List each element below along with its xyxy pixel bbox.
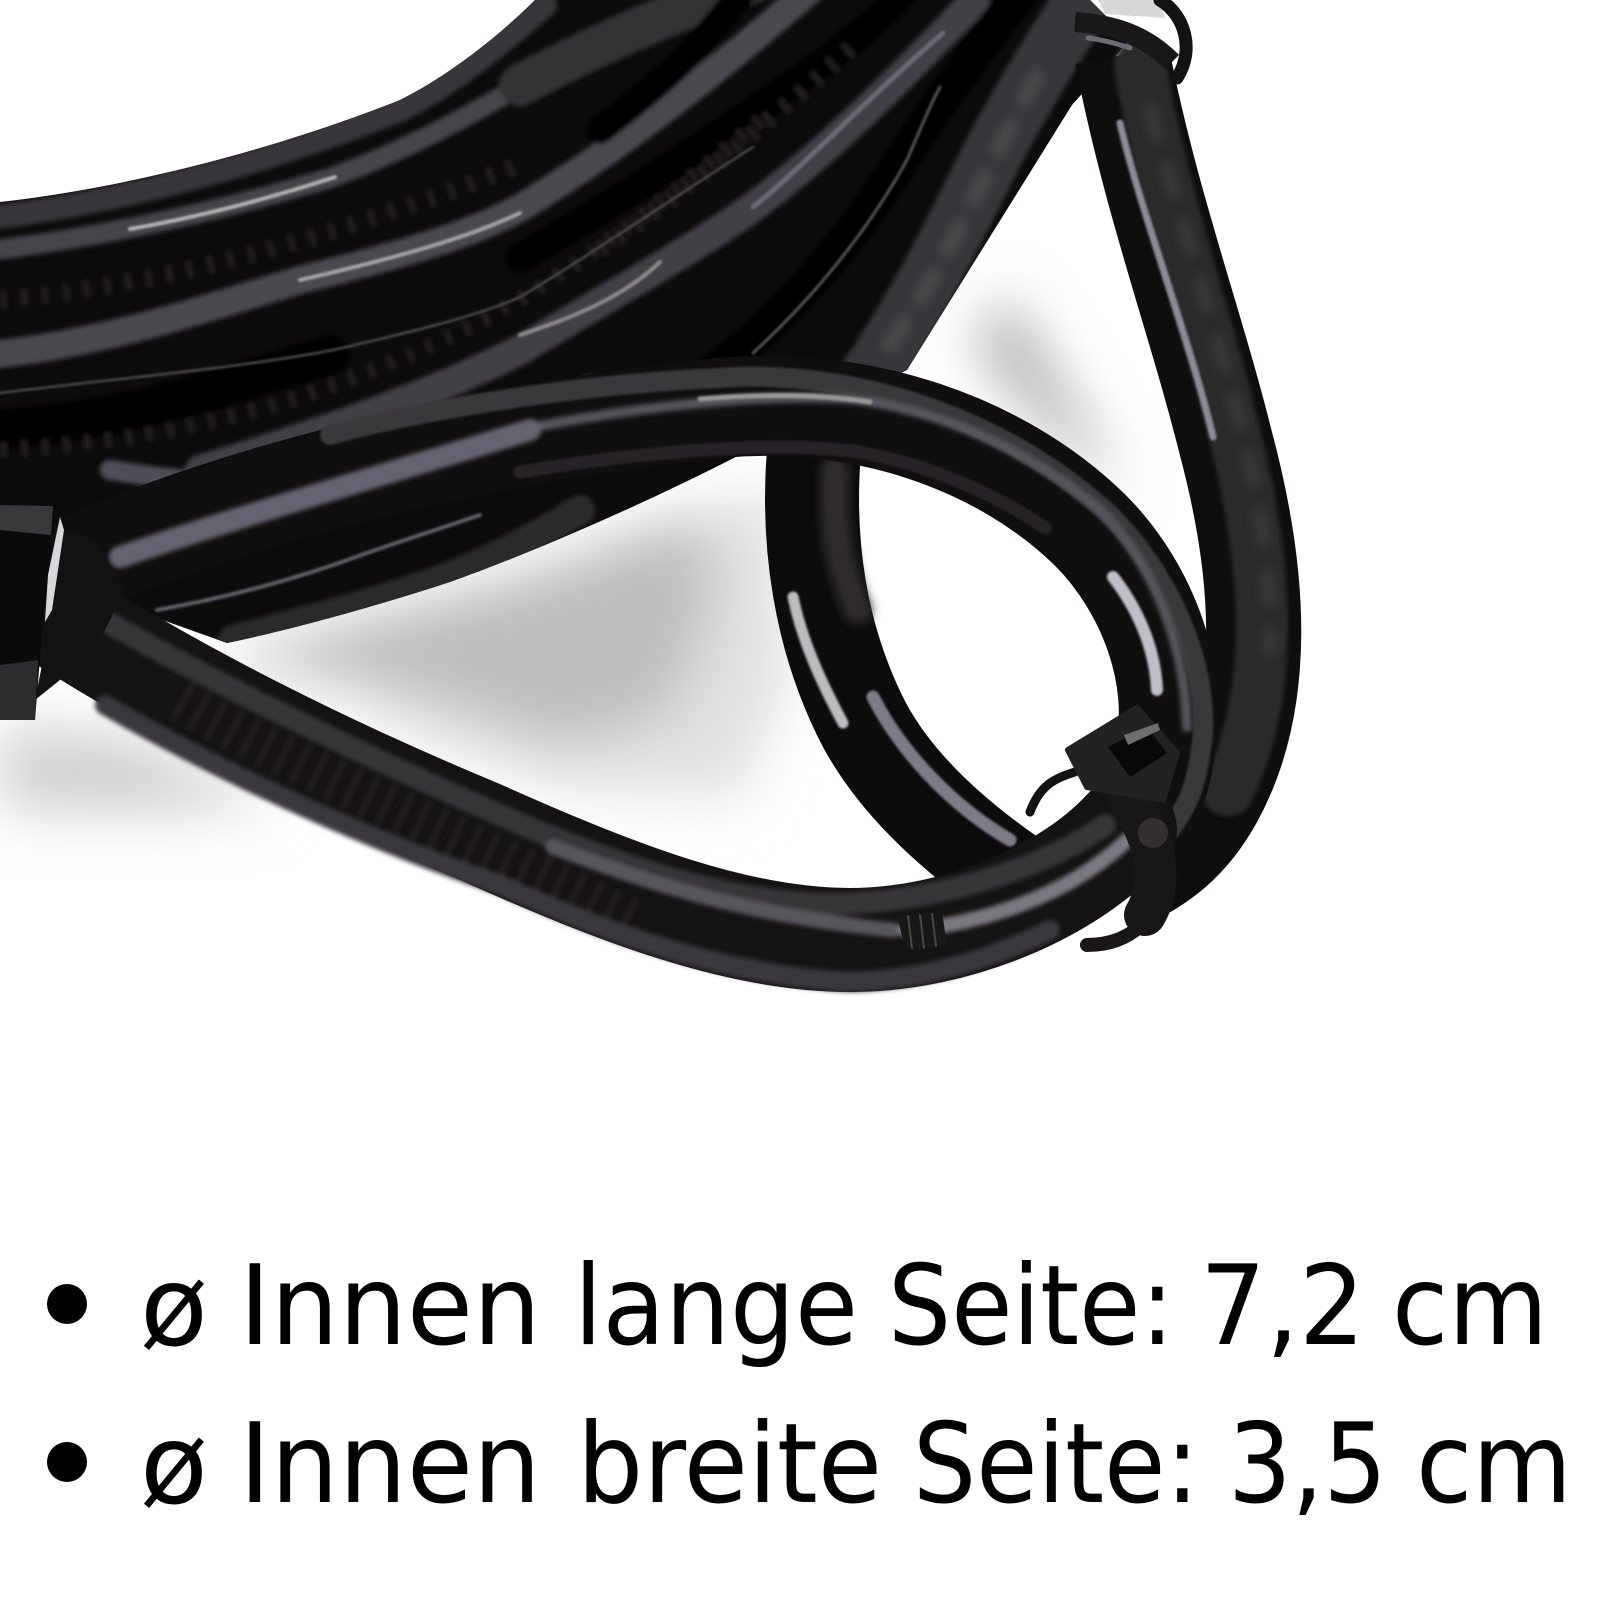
bullet item: wide side: 3,5 [1228,1400,1387,1529]
bullet item: wide side: ø [140,1401,208,1530]
bullet item: long side: 7,2 [1200,1242,1365,1371]
cable tie [1030,708,1177,945]
cast shadows on white background [0,295,1125,815]
bullet item: wide side: Innen [239,1400,541,1529]
photo: coiled cable bundle [0,0,1130,643]
knurled ring on cable [897,912,947,950]
bullet item: wide side: cm [1416,1400,1572,1529]
bullet item: wide side: Seite: [913,1400,1199,1529]
bullet item: long side: lange [574,1242,858,1371]
bullet item: long side: cm [1392,1242,1548,1371]
long outer loop cable [1120,55,1270,880]
bullet item: long side: ø [140,1243,208,1372]
bullet item: long side [47,1242,1548,1372]
bullet item: wide side [47,1400,1572,1530]
bullet item: long side: Seite: [888,1242,1174,1371]
black clamp sleeve at left [0,503,125,720]
bottom loop cable [60,618,1127,982]
bullet item: wide side: breite [577,1400,882,1529]
bullet item: long side: Innen [239,1242,541,1371]
gray middle loop cable [95,377,1203,830]
metal clasp at top of cable [1075,0,1186,78]
bullet list: inner dimensions [47,1242,1572,1530]
small inner loop cable [793,440,1010,875]
